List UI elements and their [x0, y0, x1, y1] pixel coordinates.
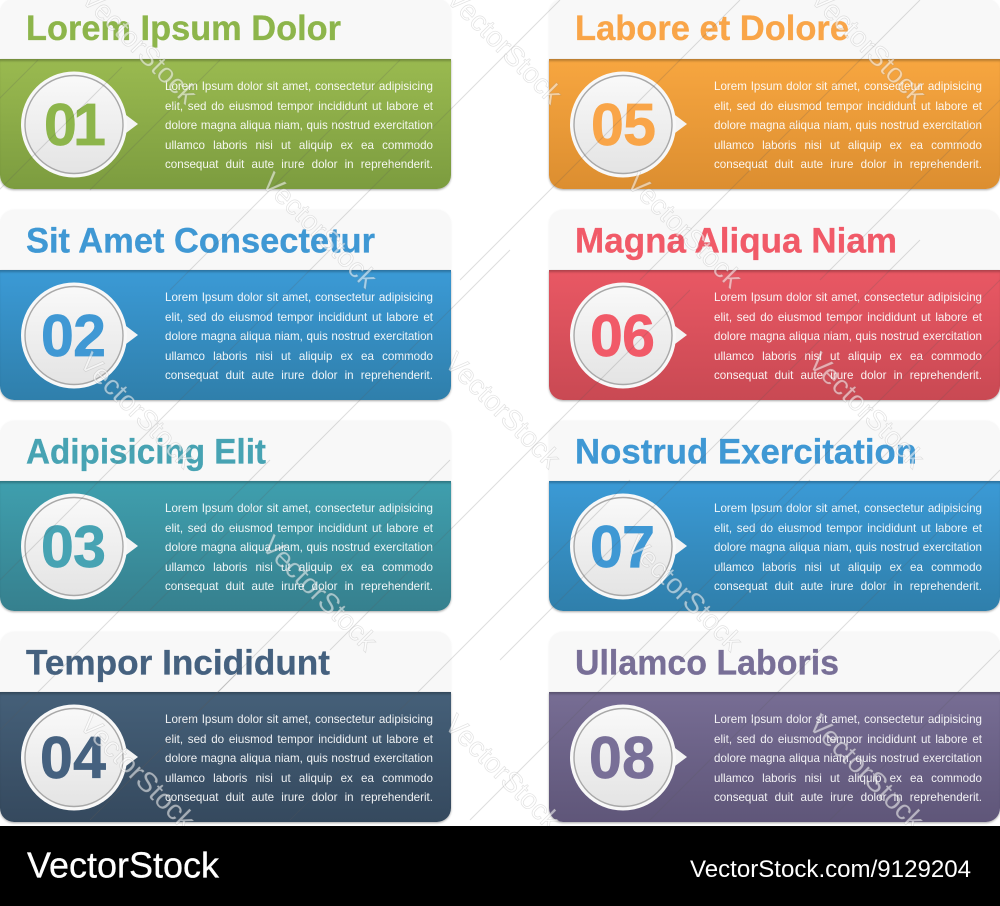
body text: Lorem Ipsum dolor sit amet, consectetur adipisicing — [714, 80, 982, 93]
watermark overlay: VectorStock — [256, 529, 384, 658]
body text: consequat duit aute irure dolor in reprehenderit. — [714, 158, 982, 171]
watermark overlay: VectorStock — [439, 346, 567, 475]
panel body — [549, 692, 1000, 822]
body text: consequat duit aute irure dolor in reprehenderit. — [165, 369, 433, 382]
panel body — [0, 59, 451, 189]
body text: elit, sed do eiusmod tempor incididunt ut labore et — [165, 733, 433, 746]
body text: elit, sed do eiusmod tempor incididunt ut labore et — [714, 311, 982, 324]
body text: Lorem Ipsum dolor sit amet, consectetur adipisicing — [714, 502, 982, 515]
number badge: 03 — [41, 514, 106, 580]
body text: ullamco laboris nisi ut aliquip ex ea commodo — [714, 350, 982, 363]
body text: elit, sed do eiusmod tempor incididunt ut labore et — [714, 100, 982, 113]
panel header — [0, 632, 451, 692]
panel body — [0, 270, 451, 400]
number badge — [21, 72, 138, 178]
panel header — [549, 632, 1000, 692]
watermark overlay: VectorStock — [621, 529, 749, 658]
number badge — [570, 704, 687, 810]
body text — [714, 502, 982, 593]
panel header — [0, 0, 451, 59]
heading: Magna Aliqua Niam — [575, 220, 897, 260]
body text: consequat duit aute irure dolor in reprehenderit. — [714, 369, 982, 382]
number badge: 02 — [41, 303, 106, 369]
heading: Adipisicing Elit — [26, 432, 266, 472]
body text: elit, sed do eiusmod tempor incididunt ut labore et — [714, 522, 982, 535]
body text: ullamco laboris nisi ut aliquip ex ea commodo — [165, 561, 433, 574]
body text: Lorem Ipsum dolor sit amet, consectetur adipisicing — [165, 713, 433, 726]
body text: dolore magna aliqua niam, quis nostrud exercitation — [714, 541, 982, 554]
number badge — [21, 704, 138, 810]
panel: 02 Sit Amet Consectetur — [0, 220, 452, 402]
body text: ullamco laboris nisi ut aliquip ex ea commodo — [165, 772, 433, 785]
watermark overlay: VectorStock — [621, 166, 749, 295]
footer logo: VectorStock — [27, 844, 220, 886]
body text: consequat duit aute irure dolor in reprehenderit. — [714, 580, 982, 593]
body text: dolore magna aliqua niam, quis nostrud exercitation — [165, 541, 433, 554]
body text — [165, 80, 433, 171]
panel: 07 Nostrud Exercitation — [548, 432, 1000, 614]
body text — [714, 713, 982, 804]
panel: 08 Ullamco Laboris — [548, 642, 1000, 824]
footer logo — [27, 844, 971, 886]
number badge — [21, 282, 138, 388]
number badge — [21, 494, 138, 600]
body text — [714, 80, 982, 171]
number badge — [570, 72, 687, 178]
panel: 06 Magna Aliqua Niam — [548, 220, 1000, 402]
body text: Lorem Ipsum dolor sit amet, consectetur adipisicing — [165, 502, 433, 515]
number badge: 04 — [40, 725, 106, 791]
body text: ullamco laboris nisi ut aliquip ex ea commodo — [714, 561, 982, 574]
body text: dolore magna aliqua niam, quis nostrud exercitation — [714, 752, 982, 765]
body text — [714, 291, 982, 382]
watermark overlay: VectorStock — [74, 346, 202, 475]
heading: Sit Amet Consectetur — [26, 220, 375, 260]
body text: elit, sed do eiusmod tempor incididunt ut labore et — [714, 733, 982, 746]
body text: consequat duit aute irure dolor in reprehenderit. — [165, 158, 433, 171]
body text — [165, 291, 433, 382]
body text: Lorem Ipsum dolor sit amet, consectetur adipisicing — [714, 713, 982, 726]
number badge — [570, 494, 687, 600]
panel header — [549, 421, 1000, 481]
body text: Lorem Ipsum dolor sit amet, consectetur adipisicing — [714, 291, 982, 304]
body text: elit, sed do eiusmod tempor incididunt ut labore et — [165, 522, 433, 535]
heading: Nostrud Exercitation — [575, 432, 917, 472]
panel header — [549, 210, 1000, 270]
body text: ullamco laboris nisi ut aliquip ex ea commodo — [714, 772, 982, 785]
panel: 05 Labore et Dolore — [548, 8, 1000, 192]
number badge: 07 — [590, 514, 655, 580]
body text: dolore magna aliqua niam, quis nostrud exercitation — [165, 330, 433, 343]
body text: elit, sed do eiusmod tempor incididunt ut labore et — [165, 100, 433, 113]
body text: dolore magna aliqua niam, quis nostrud exercitation — [714, 330, 982, 343]
number badge: 05 — [591, 92, 656, 158]
panel body — [0, 481, 451, 611]
watermark overlay: VectorStock — [803, 708, 931, 837]
body text — [165, 502, 433, 593]
body text: ullamco laboris nisi ut aliquip ex ea commodo — [714, 139, 982, 152]
body text: consequat duit aute irure dolor in reprehenderit. — [165, 580, 433, 593]
body text: Lorem Ipsum dolor sit amet, consectetur adipisicing — [165, 291, 433, 304]
panel header — [549, 0, 1000, 59]
footer bar — [0, 826, 1000, 906]
watermark overlay: VectorStock — [439, 708, 567, 837]
body text: dolore magna aliqua niam, quis nostrud exercitation — [714, 119, 982, 132]
panel body — [549, 59, 1000, 189]
body text — [165, 713, 433, 804]
body text: ullamco laboris nisi ut aliquip ex ea commodo — [165, 139, 433, 152]
body text: consequat duit aute irure dolor in reprehenderit. — [165, 791, 433, 804]
panel body — [549, 270, 1000, 400]
watermark overlay: VectorStock — [803, 346, 931, 475]
watermark overlay: VectorStock — [74, 708, 202, 837]
body text: elit, sed do eiusmod tempor incididunt ut labore et — [165, 311, 433, 324]
footer logo: VectorStock.com/9129204 — [690, 856, 971, 883]
body text: dolore magna aliqua niam, quis nostrud exercitation — [165, 752, 433, 765]
heading: Ullamco Laboris — [575, 642, 839, 682]
watermark overlay: VectorStock — [256, 166, 384, 295]
body text: ullamco laboris nisi ut aliquip ex ea commodo — [165, 350, 433, 363]
number badge — [570, 282, 687, 388]
body text: consequat duit aute irure dolor in reprehenderit. — [714, 791, 982, 804]
heading: Tempor Incididunt — [26, 642, 330, 682]
number badge: 06 — [590, 303, 655, 369]
panel: 04 Tempor Incididunt — [0, 642, 452, 824]
panel body — [549, 481, 1000, 611]
panel body — [0, 692, 451, 822]
body text: dolore magna aliqua niam, quis nostrud exercitation — [165, 119, 433, 132]
body text: Lorem Ipsum dolor sit amet, consectetur adipisicing — [165, 80, 433, 93]
panel: 03 Adipisicing Elit — [0, 432, 452, 614]
heading: Lorem Ipsum Dolor — [26, 8, 341, 48]
panel: 01 Lorem Ipsum Dolor — [0, 8, 452, 192]
number badge: 01 — [44, 92, 106, 158]
panel header — [0, 210, 451, 270]
panel header — [0, 421, 451, 481]
heading: Labore et Dolore — [575, 8, 849, 48]
number badge: 08 — [589, 725, 655, 791]
